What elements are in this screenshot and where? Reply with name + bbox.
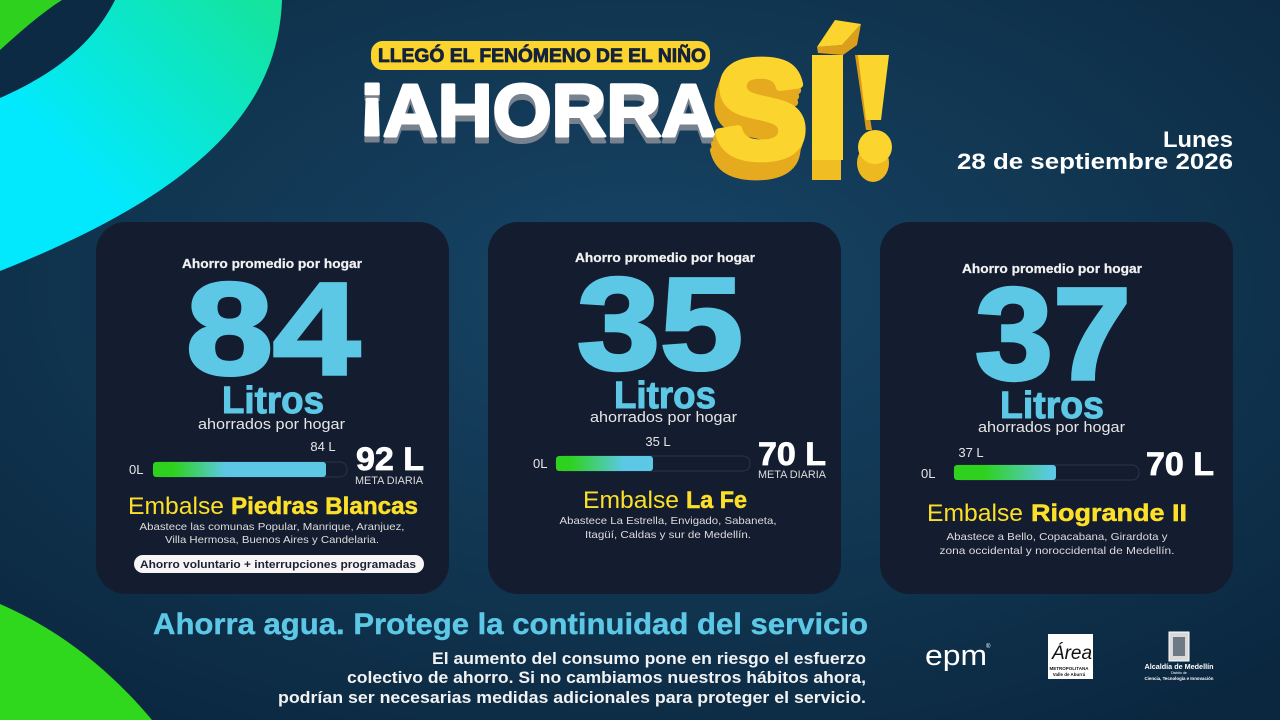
logo: Área Metropolitana: METROPOLITANA <box>1050 666 1089 671</box>
subtitle: ahorrados por hogar <box>590 409 737 426</box>
panel: Riogrande II <box>880 222 1233 594</box>
title: SÍ! 3D yellow: S <box>713 39 805 193</box>
unit: Litros <box>222 380 324 422</box>
description: Itagüí, Caldas y sur de Medellín. <box>585 529 751 541</box>
logo: Alcaldía de Medellín <box>1144 632 1214 681</box>
title: SÍ! 3D yellow: S <box>711 45 803 199</box>
description: Abastece a Bello, Copacabana, Girardota y <box>946 531 1168 543</box>
footer text: podrían ser necesarias medidas adicionales para proteger el servicio. <box>278 688 866 707</box>
date: 28 de septiembre 2026 <box>957 149 1233 174</box>
title: SÍ! 3D yellow: S <box>715 33 807 187</box>
logo: Alcaldía de Medellín: Distrito de <box>1171 671 1187 675</box>
goal: 70 L <box>758 436 826 472</box>
decorative shape: bottom-left green <box>0 604 152 720</box>
goal: META DIARIA <box>758 469 827 481</box>
title: SÍ! 3D yellow <box>710 20 892 205</box>
footer text: colectivo de ahorro. Si no cambiamos nuestros hábitos ahora, <box>347 668 866 687</box>
big number: 35 <box>577 250 743 397</box>
progress bar: 0L <box>129 462 143 477</box>
reservoir name: Riogrande II <box>1031 500 1187 527</box>
title: ¡AHORRA: ¡ <box>358 62 386 145</box>
title badge <box>371 41 710 70</box>
title: ¡AHORRA: AHORRA <box>383 75 716 158</box>
goal: 92 L <box>356 441 424 477</box>
date: Lunes <box>1163 127 1233 152</box>
panel: La Fe <box>488 222 841 594</box>
footer heading: Ahorra agua. Protege la continuidad del servicio <box>153 608 868 641</box>
unit: Litros <box>614 375 716 417</box>
footer text <box>278 649 866 707</box>
title: ¡AHORRA: AHORRA <box>383 69 716 152</box>
big number: 37 <box>975 260 1131 407</box>
logo: Área Metropolitana: Área <box>1051 643 1092 664</box>
description <box>140 521 404 546</box>
progress bar <box>921 445 1139 481</box>
logo: Área Metropolitana: Valle de Aburrá <box>1053 672 1086 677</box>
reservoir name: Embalse <box>128 493 224 520</box>
progress bar <box>129 439 347 477</box>
footer text: El aumento del consumo pone en riesgo el esfuerzo <box>432 649 866 668</box>
progress bar: 84 L <box>310 439 336 454</box>
logo: Área Metropolitana <box>1048 634 1093 679</box>
reservoir name: Embalse <box>927 500 1023 527</box>
description: Abastece La Estrella, Envigado, Sabaneta, <box>560 515 776 527</box>
progress bar: 0L <box>921 466 935 481</box>
reservoir name <box>583 487 747 514</box>
description: Abastece las comunas Popular, Manrique, Aranjuez, <box>140 521 404 533</box>
date <box>957 127 1233 174</box>
subtitle: ahorrados por hogar <box>978 419 1125 436</box>
reservoir name <box>128 493 418 520</box>
description <box>940 531 1174 557</box>
logo: epm: epm <box>925 640 987 672</box>
note pill: Ahorro voluntario + interrupciones programadas <box>140 559 416 571</box>
description <box>560 515 776 541</box>
panel heading: Ahorro promedio por hogar <box>962 261 1142 276</box>
title badge: LLEGÓ EL FENÓMENO DE EL NIÑO <box>378 45 706 67</box>
progress bar: 0L <box>533 456 547 471</box>
description: zona occidental y noroccidental de Medellín. <box>940 545 1174 557</box>
goal: META DIARIA <box>355 475 424 487</box>
unit: Litros <box>1000 385 1104 427</box>
reservoir name: Embalse <box>583 487 679 514</box>
reservoir name: La Fe <box>686 487 747 514</box>
note pill <box>134 555 424 573</box>
title: SÍ! 3D yellow: S <box>710 51 802 205</box>
panel heading: Ahorro promedio por hogar <box>182 256 362 271</box>
progress bar: 37 L <box>958 445 984 460</box>
goal: 70 L <box>1146 446 1214 482</box>
subtitle: ahorrados por hogar <box>198 416 345 433</box>
title: ¡AHORRA: ¡ <box>358 56 386 139</box>
logo: Alcaldía de Medellín: Ciencia, Tecnología e Innovación <box>1144 676 1214 681</box>
reservoir name: Piedras Blancas <box>231 493 418 520</box>
decorative shape: top-left swoosh <box>0 0 282 271</box>
logo: Alcaldía de Medellín: Alcaldía de Medellín <box>1144 662 1214 671</box>
big number: 84 <box>186 255 360 402</box>
panel heading: Ahorro promedio por hogar <box>575 250 755 265</box>
reservoir name <box>927 500 1187 527</box>
description: Villa Hermosa, Buenos Aires y Candelaria. <box>165 534 379 546</box>
progress bar <box>533 434 750 471</box>
logo: epm: ® <box>986 643 991 650</box>
progress bar: 35 L <box>645 434 671 449</box>
panel: Piedras Blancas <box>96 222 449 594</box>
